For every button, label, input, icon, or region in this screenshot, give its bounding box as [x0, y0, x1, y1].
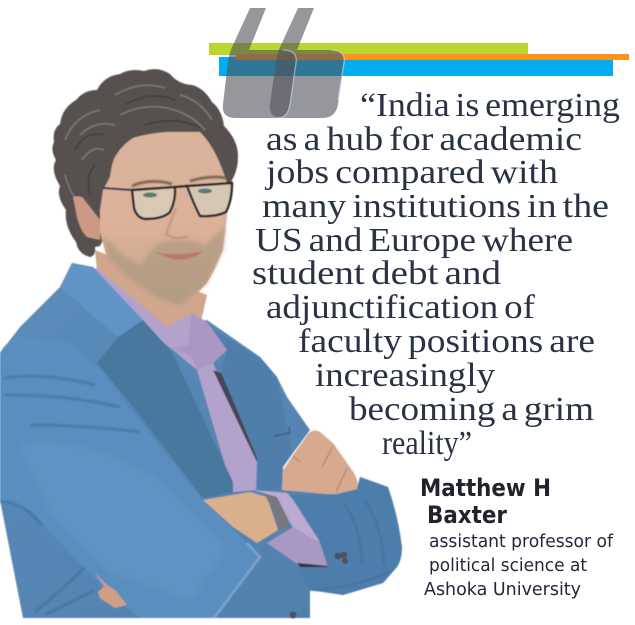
attribution name: Matthew H [420, 474, 551, 502]
forearm sleeve edge [214, 543, 260, 618]
jacket silhouette [0, 263, 402, 618]
quote text: many institutions in the [262, 188, 609, 225]
cuff folds [310, 500, 390, 590]
left lapel [97, 320, 233, 498]
icon: quotation marks [223, 8, 344, 118]
lower hand [95, 573, 127, 608]
photo: Matthew H Baxter [0, 69, 402, 619]
upper shirt cuff [253, 490, 320, 542]
blue colour bar [219, 57, 613, 76]
nose shadow [166, 208, 188, 238]
front bottom button [290, 612, 296, 618]
quote text: student debt and [252, 255, 501, 292]
collar of left lapel [60, 263, 143, 337]
lime colour bar [209, 43, 528, 55]
attribution name [420, 474, 551, 529]
right lapel [213, 330, 292, 490]
attribution role: assistant professor of [429, 532, 614, 552]
quote text [252, 87, 620, 462]
hair curls [65, 85, 212, 205]
sleeve buttons [334, 552, 348, 564]
quote text: jobs compared with [265, 154, 558, 191]
pocket square line [274, 427, 290, 436]
eyebrows [132, 177, 226, 186]
watch [263, 492, 290, 532]
quote text: US and Europe where [255, 222, 573, 259]
quote text: faculty positions are [298, 323, 595, 360]
sleeve folds [0, 376, 140, 615]
glasses [103, 183, 232, 219]
face [100, 132, 227, 305]
cuff shadow [297, 563, 330, 575]
sleeve highlight [20, 443, 225, 600]
hair [52, 69, 238, 257]
quote text: reality” [382, 425, 472, 462]
quote text: becoming a grim [349, 391, 594, 428]
shirt collar shading [172, 313, 227, 370]
ear [73, 196, 100, 240]
attribution role [424, 532, 614, 600]
attribution name: Baxter [427, 501, 507, 529]
quote text: adjunctification of [266, 289, 536, 326]
forearm skin [203, 492, 278, 543]
shirt [88, 268, 257, 492]
orange colour bar [236, 54, 629, 60]
quote text: “India is emerging [360, 87, 620, 124]
attribution role: political science at [429, 556, 587, 576]
quote text: increasingly [315, 357, 495, 394]
jacket cuff sleeve [290, 477, 402, 595]
neck [95, 250, 207, 357]
lower shirt cuff [267, 527, 328, 568]
mouth [154, 251, 203, 260]
stubble [103, 225, 226, 305]
upper hand [282, 430, 358, 495]
dark gap beside shirt [213, 370, 258, 462]
quote text: as a hub for academic [266, 121, 582, 158]
attribution role: Ashoka University [424, 580, 581, 600]
upper arm sleeve [0, 338, 260, 618]
